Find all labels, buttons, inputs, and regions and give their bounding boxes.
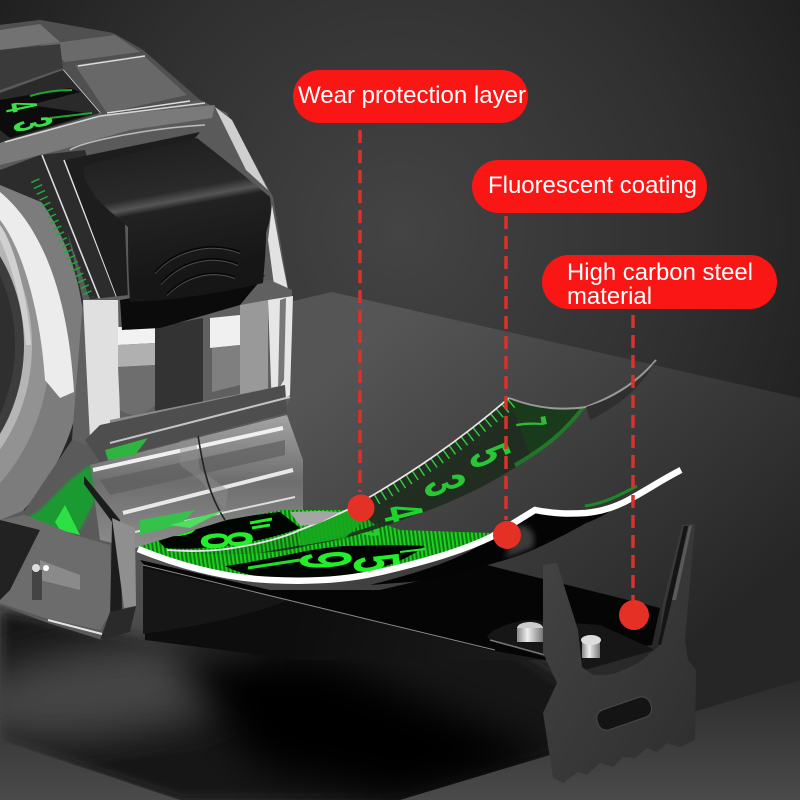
right edge highlight xyxy=(215,107,268,190)
white tape edge xyxy=(138,470,681,581)
housing body xyxy=(0,20,303,640)
button xyxy=(83,138,271,302)
hook plate xyxy=(543,524,696,783)
callout: wear protection layer xyxy=(293,70,528,522)
icon: grip arcs xyxy=(155,247,240,295)
tape release glare xyxy=(290,511,340,526)
upper tape xyxy=(150,360,656,560)
housing window with green numerals: 3 xyxy=(2,113,64,136)
tape numerals: 8 xyxy=(185,529,269,551)
rivets xyxy=(517,622,543,634)
housing window with green numerals xyxy=(0,70,100,143)
green edge on right tape xyxy=(585,486,637,506)
corner pillar xyxy=(84,476,122,620)
lower left box xyxy=(0,515,112,630)
lower tape: 9 xyxy=(284,549,368,571)
callout: wear protection layer: Wear protection layer xyxy=(298,82,526,109)
upper tape: 3 xyxy=(411,467,479,504)
callout: fluorescent coating xyxy=(472,160,707,549)
under-button panel xyxy=(72,280,292,450)
top rim xyxy=(0,105,215,165)
lower tape: 5 xyxy=(339,550,414,577)
lower tape xyxy=(138,510,491,578)
callout: fluorescent coating: Fluorescent coating xyxy=(488,172,697,199)
callout: high carbon steel material: material xyxy=(567,283,652,310)
green glow in body xyxy=(105,438,148,460)
side band with green scale xyxy=(0,150,125,300)
top cover panels xyxy=(0,20,200,115)
transparent housing xyxy=(0,20,303,640)
callout: high carbon steel material: High carbon steel xyxy=(567,259,753,286)
hook with rivets xyxy=(487,524,696,783)
button shadow xyxy=(120,275,265,330)
upper tape: 4 xyxy=(370,497,434,528)
table surface xyxy=(0,292,800,800)
lower tape: 7 xyxy=(331,521,391,543)
wheel on housing side xyxy=(0,123,85,567)
upper tape: 7 xyxy=(505,414,555,433)
slot xyxy=(594,694,654,733)
blade underside xyxy=(140,503,660,660)
upper tape: 5 xyxy=(457,435,524,476)
rivet strap xyxy=(487,620,655,670)
lower body xyxy=(90,415,303,548)
callout: high carbon steel material xyxy=(542,255,777,630)
